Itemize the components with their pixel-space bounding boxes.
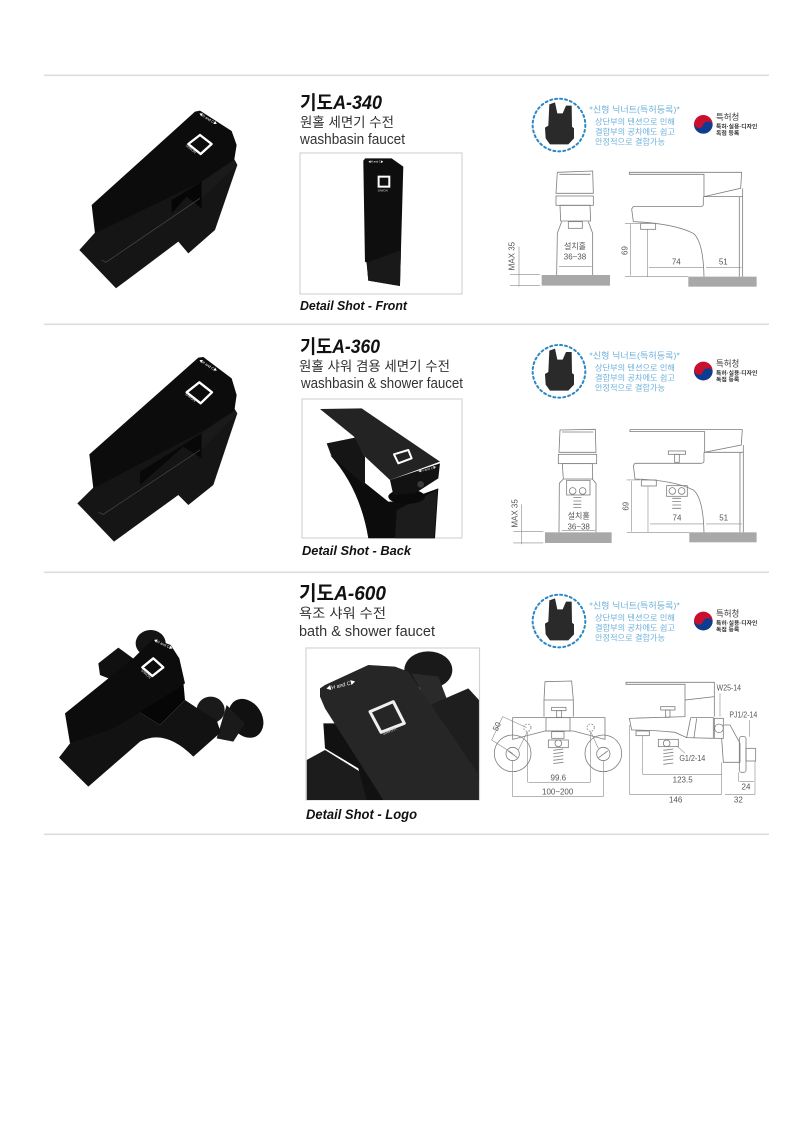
technical drawing: side view [626, 682, 758, 804]
panel: 기도A-360 [77, 336, 757, 558]
Korean name: 원홀 세면기 수전 [300, 115, 394, 130]
technical drawing: side view: 123.5 [673, 775, 693, 784]
Korean name: 원홀 샤워 겸용 세면기 수전 [299, 359, 450, 374]
callout: new nut: 상단부의 텐션으로 인해 [595, 363, 675, 373]
technical drawing: front view: 100~200 [542, 787, 574, 796]
callout: new nut: 상단부의 텐션으로 인해 [595, 613, 675, 623]
detail photo: logo: siwon [382, 726, 397, 737]
technical drawing: side view: G1/2-14 [679, 754, 706, 763]
technical drawing: side view: 69 [621, 246, 630, 255]
detail photo: back: ◀H and C▶ [417, 464, 438, 474]
callout: new nut [533, 345, 681, 398]
English name: bath & shower faucet [299, 624, 435, 640]
callout: new nut: 결합부의 공차에도 쉽고 [595, 127, 675, 137]
technical drawing: front view [510, 429, 612, 544]
detail photo: logo [306, 648, 480, 800]
technical drawing: side view: W25-14 [717, 684, 741, 693]
technical drawing: side view: 51 [719, 513, 729, 522]
technical drawing: front view: 설치홀 [564, 241, 586, 251]
detail photo: front: ◀H and C▶ [368, 160, 384, 164]
technical drawing: front view: 설치홀 [568, 511, 590, 521]
patent office mark: 특허·실용·디자인 [716, 369, 757, 377]
technical drawing: side view: PJ1/2-14 [729, 711, 758, 720]
technical drawing: side view: 24 [742, 782, 751, 791]
patent office mark: 특허청 [716, 112, 739, 122]
panel: 기도A-340 [79, 92, 757, 313]
technical drawing: front view: MAX 35 [510, 499, 519, 528]
callout: new nut: *신형 닉너트(특허등록)* [589, 350, 681, 360]
technical drawing: front view [508, 171, 610, 287]
technical drawing: front view: 50 [491, 720, 503, 733]
detail caption: Detail Shot - Front [300, 298, 408, 313]
product photo: 기도A-360 faucet: ◀H and C▶ [198, 358, 219, 373]
title: 기도A-340 [300, 92, 382, 114]
product photo: 기도A-600 faucet: SIWON [140, 668, 152, 680]
patent office mark: 특허청 [716, 609, 739, 619]
Korean name: 욕조 샤워 수전 [299, 606, 386, 621]
panel: 기도A-600 [59, 582, 758, 822]
patent office mark: 독점 등록 [716, 376, 739, 384]
detail caption: Detail Shot - Back [302, 543, 412, 558]
product photo: 기도A-340 faucet: SIWON [185, 144, 197, 155]
technical drawing: side view: 74 [673, 513, 682, 522]
technical drawing: front view: 36~38 [564, 253, 587, 262]
callout: new nut: 안정적으로 결합가능 [595, 137, 665, 147]
callout: new nut [533, 99, 681, 151]
callout: new nut [533, 595, 681, 647]
detail photo: logo: ◀H and C▶ [326, 679, 356, 693]
callout: new nut: 결합부의 공차에도 쉽고 [595, 373, 675, 383]
patent office mark [694, 359, 757, 384]
product photo: 기도A-600 faucet: ◀H and C▶ [153, 637, 174, 651]
technical drawing: side view: 74 [672, 257, 681, 266]
technical drawing: front view: 99.6 [551, 773, 567, 782]
technical drawing: front view [491, 681, 622, 797]
technical drawing: side view: 32 [734, 795, 743, 804]
callout: new nut: *신형 닉너트(특허등록)* [589, 600, 681, 610]
title: 기도A-360 [300, 336, 380, 358]
callout: new nut: 안정적으로 결합가능 [595, 633, 665, 643]
detail caption: Detail Shot - Logo [306, 807, 417, 822]
technical drawing: front view: MAX 35 [508, 241, 517, 270]
technical drawing: side view [621, 172, 757, 287]
product photo: 기도A-340 faucet [79, 111, 237, 288]
patent office mark [694, 609, 757, 634]
patent office mark: 특허·실용·디자인 [716, 619, 757, 627]
callout: new nut: 결합부의 공차에도 쉽고 [595, 623, 675, 633]
detail photo: back [302, 399, 462, 538]
callout: new nut: 상단부의 텐션으로 인해 [595, 117, 675, 127]
patent office mark [694, 112, 757, 137]
callout: new nut: 안정적으로 결합가능 [595, 383, 665, 393]
patent office mark: 특허청 [716, 359, 739, 369]
product photo: 기도A-360 faucet [77, 357, 237, 542]
technical drawing: front view: 36~38 [567, 522, 590, 531]
technical drawing: side view: 146 [669, 795, 683, 804]
detail photo: front: SIWON [378, 189, 388, 193]
technical drawing: side view [622, 430, 757, 542]
product photo: 기도A-340 faucet: ◀H and C▶ [198, 111, 219, 126]
technical drawing: side view: 69 [622, 501, 631, 511]
English name: washbasin & shower faucet [300, 376, 463, 392]
title: 기도A-600 [299, 582, 386, 605]
technical drawing: side view: 51 [719, 257, 728, 266]
product photo: 기도A-600 faucet [59, 630, 270, 787]
patent office mark: 독점 등록 [716, 129, 739, 137]
English name: washbasin faucet [299, 132, 405, 148]
patent office mark: 특허·실용·디자인 [716, 122, 757, 130]
patent office mark: 독점 등록 [716, 626, 739, 634]
product photo: 기도A-360 faucet: SIWON [184, 392, 197, 403]
callout: new nut: *신형 닉너트(특허등록)* [589, 104, 681, 114]
detail photo: front [300, 153, 462, 294]
